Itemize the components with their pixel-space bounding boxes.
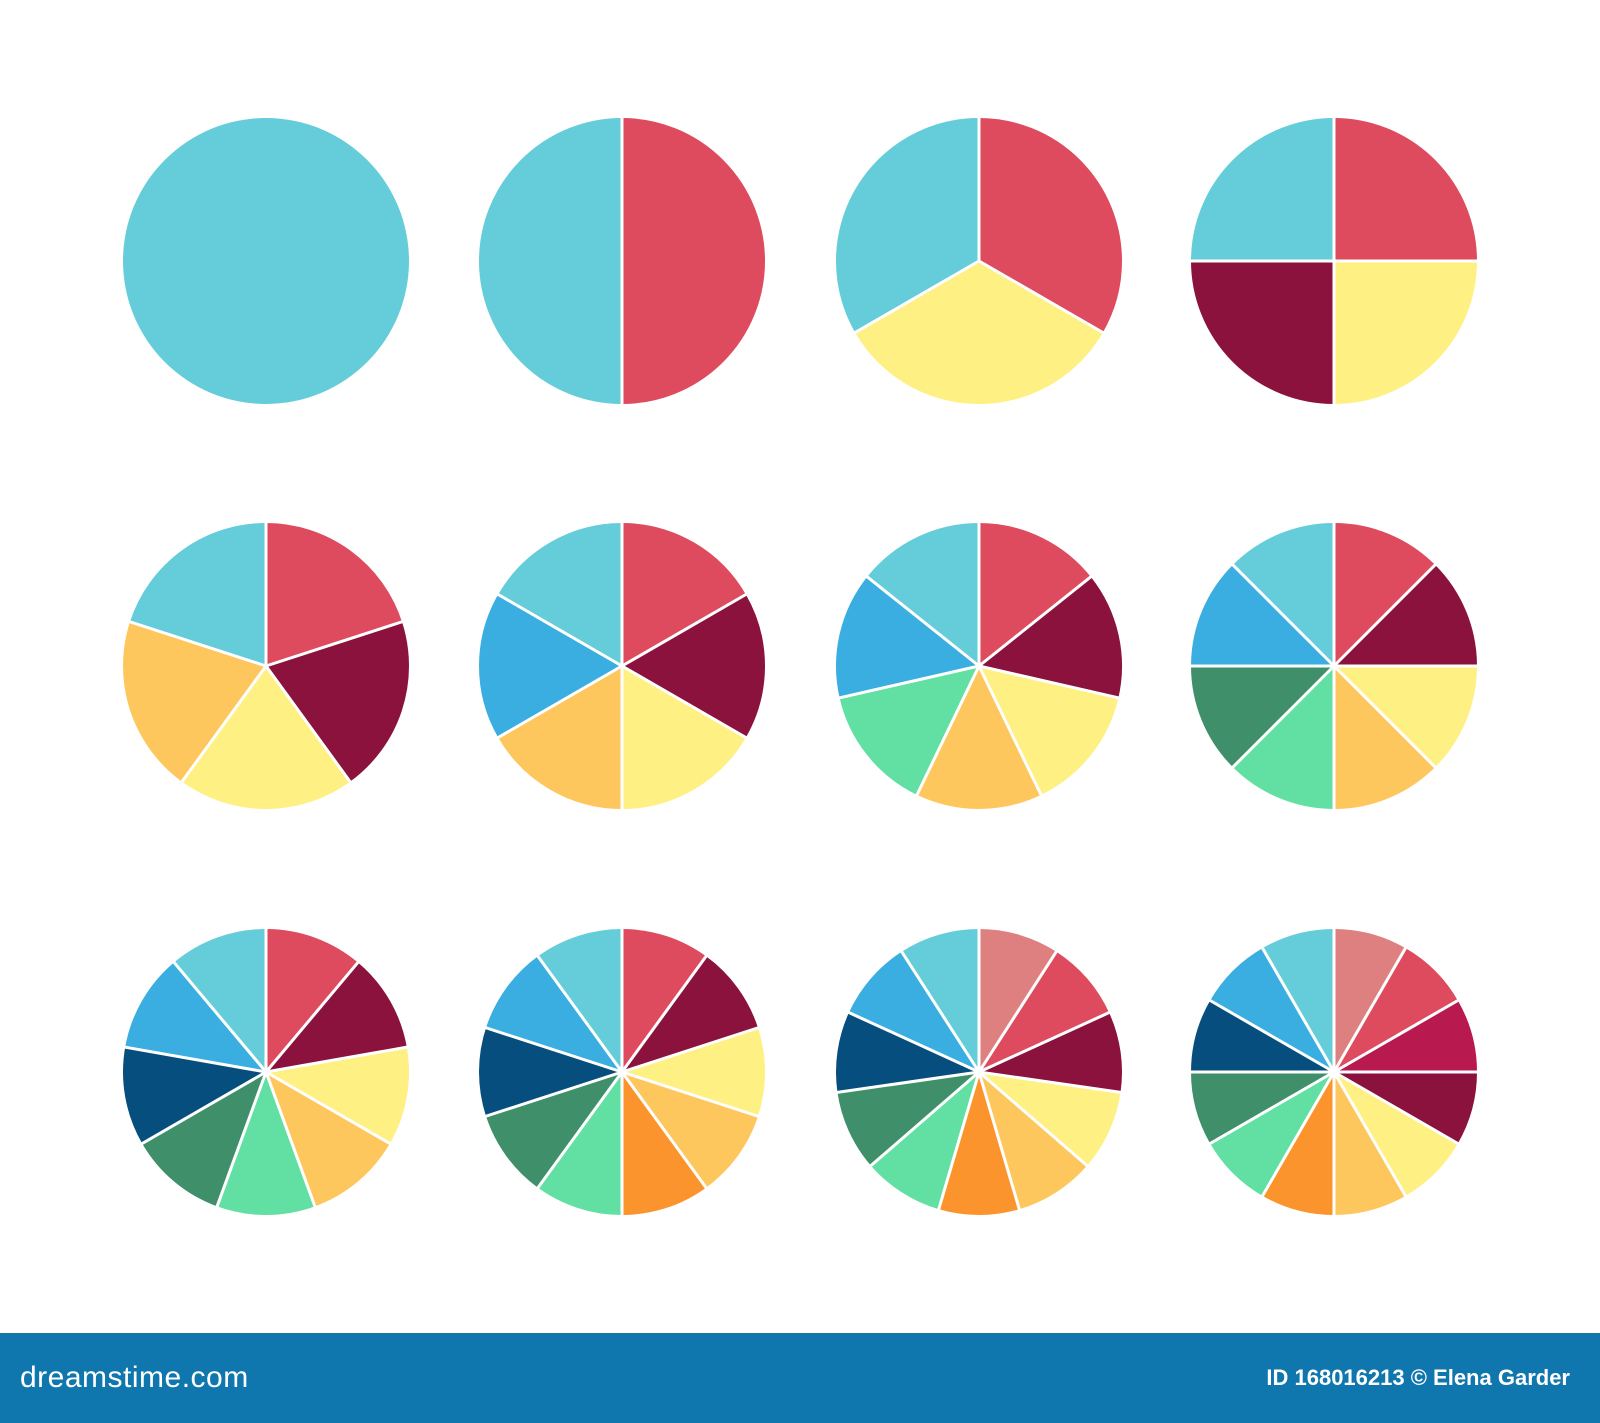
pie 6: six slices: [497, 522, 747, 810]
pie 9: nine slices: [124, 928, 408, 1207]
pie 7: seven slices: [839, 522, 1119, 796]
pie 4: four slices: [1190, 117, 1478, 405]
pie 12: twelve slices: [1190, 928, 1478, 1216]
pie 11: eleven slices: [836, 928, 1122, 1210]
footer credit text: ID 168016213 © Elena Garder: [1266, 1365, 1570, 1390]
pie 5: five slices: [129, 522, 403, 782]
pie 1: one slice: [123, 118, 409, 404]
footer logo text: dreamstime.com: [20, 1361, 249, 1394]
pie 3: three slices: [854, 117, 1104, 359]
pie 2: two slices: [550, 117, 694, 405]
pie 8: eight slices: [1190, 522, 1478, 810]
footer bar: [0, 1333, 1600, 1423]
pie 10: ten slices: [485, 928, 759, 1216]
